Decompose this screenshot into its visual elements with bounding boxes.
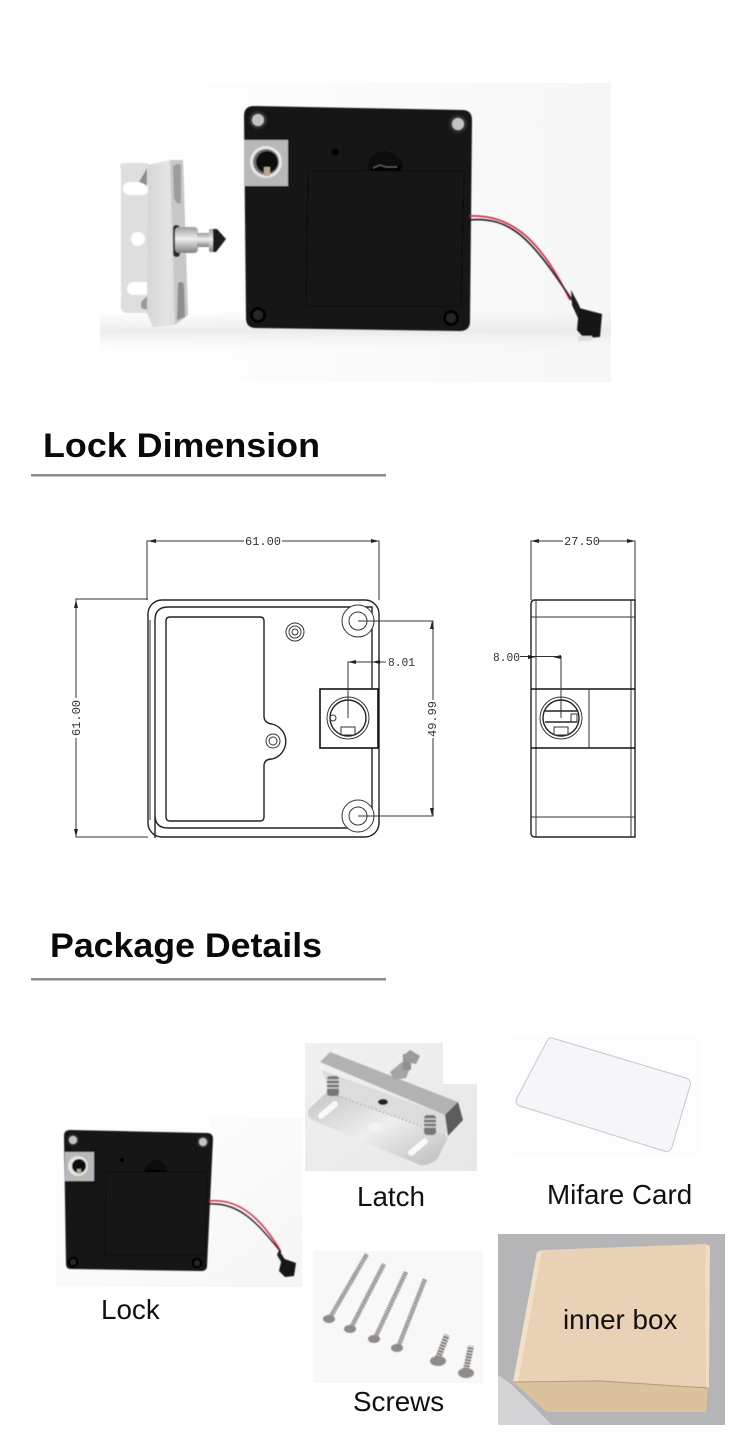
dimension: 8.00: 8.00 <box>493 651 520 665</box>
housing outline <box>531 600 635 837</box>
label: Screws: Screws <box>353 1386 444 1417</box>
dimension: 8.00 <box>493 651 561 718</box>
screw post center <box>266 734 280 748</box>
drawing: side view dimensions <box>493 534 635 837</box>
label: inner box: inner box <box>563 1304 677 1335</box>
label: Latch: Latch <box>357 1181 425 1212</box>
latch bracket <box>120 160 226 327</box>
latch photo <box>305 1043 477 1171</box>
cable and connector <box>469 216 602 341</box>
label: Mifare Card: Mifare Card <box>547 1179 692 1210</box>
screws photo <box>313 1251 483 1383</box>
mounting hole top <box>342 605 374 637</box>
item: Mifare Card <box>512 1037 698 1210</box>
screw post top <box>286 623 304 641</box>
label: Lock: Lock <box>101 1294 160 1325</box>
dimension: width 61.00: 61.00 <box>245 535 281 549</box>
item: Lock <box>56 1118 302 1325</box>
item: inner box <box>498 1234 725 1425</box>
item: Latch <box>305 1043 477 1212</box>
dimension: width 61.00 <box>147 534 379 600</box>
heading: Lock Dimension: Lock Dimension <box>43 427 320 465</box>
panel: product photo of lock and latch <box>100 83 611 382</box>
key cylinder <box>320 689 378 748</box>
drawing: front view dimensions <box>69 534 440 838</box>
lock body <box>244 106 472 331</box>
mounting hole bottom <box>342 800 374 832</box>
dimension: 27.50 <box>531 534 635 600</box>
outer housing outline <box>148 600 379 838</box>
box photo <box>498 1234 725 1425</box>
dimension: height 61.00: 61.00 <box>70 700 84 736</box>
dimension: 8.01 <box>348 656 415 718</box>
dimension: hole spacing 49.99 <box>358 621 440 816</box>
dimension: 8.01: 8.01 <box>388 656 415 670</box>
battery cover outline <box>166 617 286 821</box>
key cylinder side <box>540 697 582 739</box>
item: Screws <box>313 1251 483 1417</box>
photo background <box>100 83 611 382</box>
dimension: hole spacing 49.99: 49.99 <box>426 701 440 737</box>
lock photo <box>56 1118 302 1287</box>
heading: Package Details: Package Details <box>50 927 322 965</box>
card photo <box>512 1037 698 1155</box>
dimension: height 61.00 <box>69 599 148 837</box>
dimension: 27.50: 27.50 <box>564 535 600 549</box>
